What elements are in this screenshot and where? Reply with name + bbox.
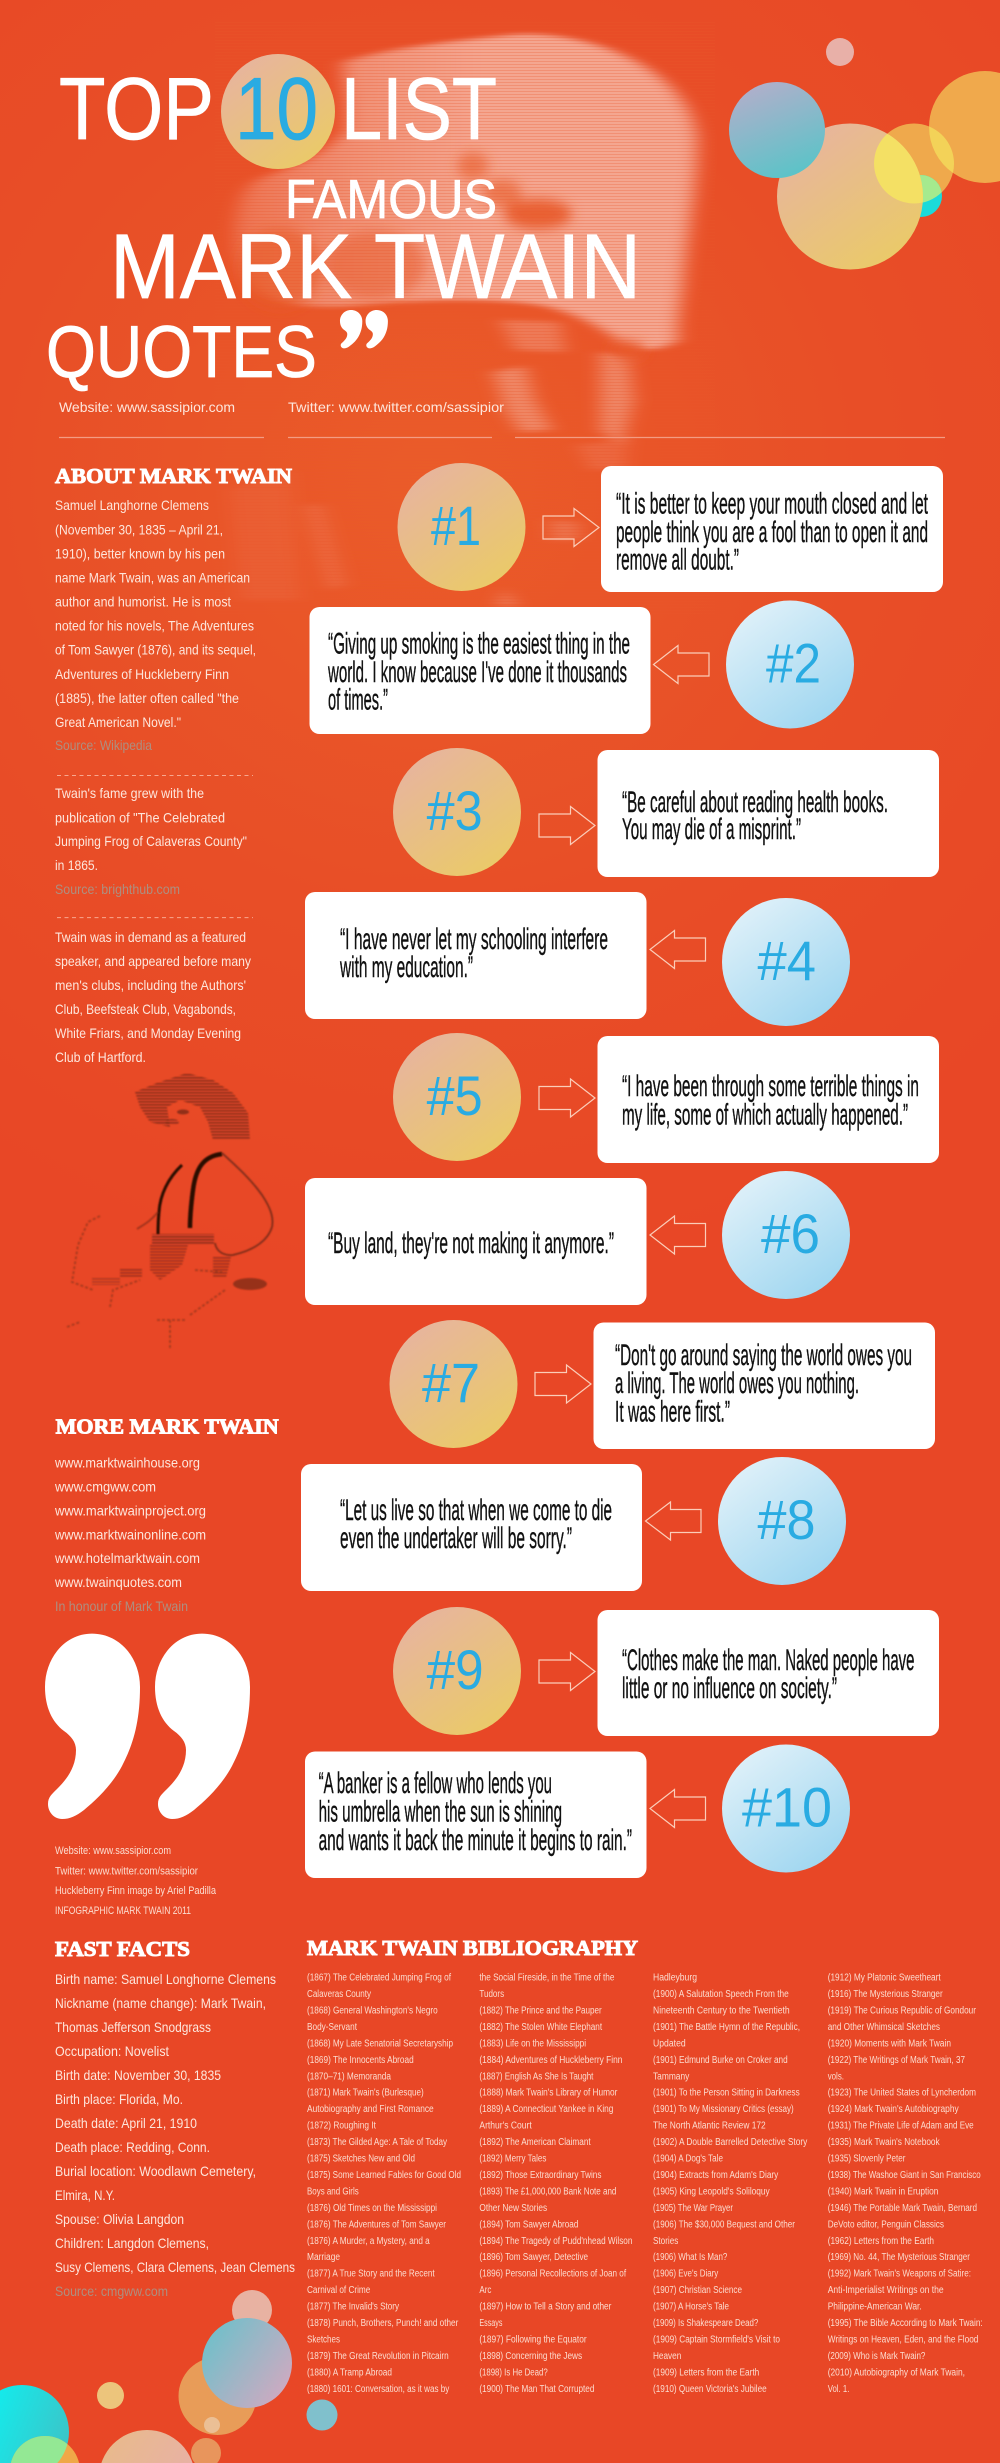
quote card 10: and wants it back the minute it begins to rain.” bbox=[319, 1824, 632, 1857]
bibliography column 2: (1892) Merry Tales bbox=[479, 2154, 546, 2164]
bibliography column 1: (1876) The Adventures of Tom Sawyer bbox=[307, 2219, 447, 2230]
number circle #1: #1 bbox=[431, 494, 481, 557]
bibliography column 1: Boys and Girls bbox=[307, 2186, 359, 2197]
number circle #2: #2 bbox=[766, 632, 821, 694]
bibliography column 2: (1898) Concerning the Jews bbox=[479, 2351, 582, 2362]
bibliography column 2: (1894) The Tragedy of Pudd'nhead Wilson bbox=[479, 2236, 632, 2247]
row: quote 6 bbox=[305, 1171, 850, 1305]
bibliography column 4: (1992) Mark Twain's Weapons of Satire: bbox=[828, 2269, 971, 2280]
number circle #1 bbox=[398, 463, 526, 591]
title number: 10: 10 bbox=[235, 59, 318, 158]
text block: jumping frog bbox=[55, 785, 247, 897]
bibliography column 4: (1912) My Platonic Sweetheart bbox=[828, 1973, 941, 1984]
bibliography column 2: (1898) Is He Dead? bbox=[479, 2367, 548, 2378]
bibliography column 4: (2009) Who is Mark Twain? bbox=[828, 2351, 926, 2362]
number circle #4: #4 bbox=[758, 929, 816, 992]
bibliography column 3: (1909) Captain Stormfield's Visit to bbox=[653, 2334, 780, 2346]
bibliography column 1: Body-Servant bbox=[307, 2022, 357, 2033]
number circle #7 bbox=[390, 1320, 518, 1448]
text block: speaker: Club, Beefsteak Club, Vagabonds, bbox=[55, 1001, 236, 1017]
bibliography column 3: Tammany bbox=[653, 2071, 689, 2082]
title: Top 10 List Famous Mark Twain Quotes bbox=[46, 54, 641, 393]
text block: speaker: Club of Hartford. bbox=[55, 1049, 146, 1065]
heading: about Mark Twain: ABOUT MARK TWAIN bbox=[55, 464, 292, 488]
panel: more Mark Twain bbox=[54, 1414, 279, 1614]
bibliography column 2: Other New Stories bbox=[479, 2203, 547, 2214]
bibliography column 2: (1897) How to Tell a Story and other bbox=[479, 2302, 612, 2313]
bibliography column 2: (1888) Mark Twain's Library of Humor bbox=[479, 2088, 618, 2099]
icon: small quotation mark bbox=[340, 310, 388, 348]
bibliography column 1: (1868) General Washington's Negro bbox=[307, 2006, 438, 2016]
bibliography column 1: (1872) Roughing It bbox=[307, 2121, 376, 2132]
list of facts: Children: Langdon Clemens, bbox=[55, 2235, 209, 2251]
bibliography column 1: Marriage bbox=[307, 2252, 340, 2263]
bibliography column 2: (1882) The Stolen White Elephant bbox=[479, 2022, 602, 2033]
number circle #5: #5 bbox=[427, 1064, 483, 1127]
bibliography column 2: (1900) The Man That Corrupted bbox=[479, 2384, 594, 2395]
list of facts: Birth name: Samuel Longhorne Clemens bbox=[55, 1971, 276, 1987]
heading: more Mark Twain: MORE MARK TWAIN bbox=[56, 1414, 279, 1438]
text block: speaker: speaker, and appeared before many bbox=[55, 953, 251, 969]
bibliography column 4: Philippine-American War. bbox=[828, 2302, 922, 2313]
number circle #10: #10 bbox=[742, 1776, 832, 1838]
bibliography column 1: (1878) Punch, Brothers, Punch! and other bbox=[307, 2318, 459, 2329]
arrow right bbox=[539, 1079, 595, 1117]
bibliography column 2: Arthur's Court bbox=[479, 2121, 532, 2132]
number circle #8 bbox=[718, 1457, 846, 1585]
list of facts: Spouse: Olivia Langdon bbox=[55, 2211, 184, 2227]
heading: bibliography: MARK TWAIN BIBLIOGRAPHY bbox=[307, 1936, 638, 1960]
bibliography column 2: Arc bbox=[479, 2285, 491, 2296]
text block: biography: name Mark Twain, was an American bbox=[55, 569, 250, 585]
list of links: In honour of Mark Twain bbox=[55, 1598, 188, 1614]
bibliography column 3: (1901) To My Missionary Critics (essay) bbox=[653, 2104, 794, 2115]
bibliography column 1: Sketches bbox=[307, 2334, 340, 2346]
quote card 1: remove all doubt.” bbox=[616, 544, 739, 576]
bibliography column 3: (1905) The War Prayer bbox=[653, 2203, 734, 2214]
bibliography column 1: (1879) The Great Revolution in Pitcairn bbox=[307, 2351, 449, 2362]
text block: biography bbox=[55, 497, 256, 753]
credits: INFOGRAPHIC MARK TWAIN 2011 bbox=[55, 1905, 191, 1917]
bibliography column 3: Nineteenth Century to the Twentieth bbox=[653, 2006, 790, 2016]
bibliography column 4: Vol. 1. bbox=[828, 2384, 849, 2395]
list of links: www.hotelmarktwain.com bbox=[54, 1550, 200, 1566]
arrow left bbox=[650, 1790, 706, 1828]
bibliography column 3: (1905) King Leopold's Soliloquy bbox=[653, 2186, 770, 2197]
number circle #6: #6 bbox=[761, 1202, 820, 1265]
quote card 6 bbox=[305, 1178, 646, 1305]
bibliography column 2: (1884) Adventures of Huckleberry Finn bbox=[479, 2055, 622, 2066]
row: quote 4 bbox=[305, 892, 850, 1026]
arrow right bbox=[543, 508, 599, 546]
bibliography column 1: (1876) Old Times on the Mississippi bbox=[307, 2203, 437, 2214]
arrow right bbox=[539, 1652, 595, 1690]
text block: biography: 1910), better known by his pen bbox=[55, 545, 225, 561]
quote card 6: “Buy land, they're not making it anymore.” bbox=[328, 1227, 614, 1260]
website and twitter links: Website: www.sassipior.com bbox=[59, 399, 235, 415]
list of facts: Death date: April 21, 1910 bbox=[55, 2115, 197, 2131]
row: quote 10 bbox=[305, 1744, 850, 1878]
credits: Website: www.sassipior.com bbox=[55, 1845, 171, 1857]
bibliography column 3: Heaven bbox=[653, 2351, 681, 2362]
row: quote 7 bbox=[390, 1320, 935, 1449]
arrow left bbox=[646, 1502, 701, 1540]
panel: fast facts bbox=[55, 1937, 295, 2299]
text block: biography: Adventures of Huckleberry Finn bbox=[55, 666, 229, 682]
list of facts: Elmira, N.Y. bbox=[55, 2187, 115, 2203]
number circle #5 bbox=[393, 1033, 521, 1161]
row: quote 9 bbox=[393, 1607, 939, 1736]
bibliography column 4: (1920) Moments with Mark Twain bbox=[828, 2038, 951, 2049]
panel: about Mark Twain bbox=[55, 464, 292, 1065]
text block: speaker: Twain was in demand as a featured bbox=[55, 929, 246, 945]
quote card 2 bbox=[310, 607, 650, 734]
bibliography column 1: (1877) A True Story and the Recent bbox=[307, 2269, 435, 2280]
quote card 3: You may die of a misprint.” bbox=[622, 813, 801, 846]
bibliography column 3: (1901) The Battle Hymn of the Republic, bbox=[653, 2022, 800, 2033]
arrow right bbox=[539, 806, 595, 844]
list of facts: Birth place: Florida, Mo. bbox=[55, 2091, 183, 2107]
quote card 8: “Let us live so that when we come to die bbox=[340, 1494, 612, 1527]
bibliography column 1: (1876) A Murder, a Mystery, and a bbox=[307, 2236, 430, 2247]
list of links: www.twainquotes.com bbox=[54, 1574, 182, 1590]
number circle #10 bbox=[722, 1744, 850, 1872]
bibliography column 1: (1868) My Late Senatorial Secretaryship bbox=[307, 2038, 453, 2049]
heading: fast facts: FAST FACTS bbox=[55, 1937, 190, 1961]
title words: MARK TWAIN: MARK TWAIN bbox=[110, 216, 641, 318]
text block: jumping frog: publication of "The Celebrated bbox=[55, 809, 225, 825]
sketch: Huckleberry Finn bbox=[67, 1073, 273, 1350]
bibliography column 2: (1893) The £1,000,000 Bank Note and bbox=[479, 2186, 616, 2197]
bibliography column 1: (1875) Some Learned Fables for Good Old bbox=[307, 2170, 461, 2181]
list of facts: Thomas Jefferson Snodgrass bbox=[55, 2019, 211, 2035]
bibliography column 2: (1897) Following the Equator bbox=[479, 2334, 587, 2346]
quote card 2: world. I know because I've done it thousands bbox=[327, 656, 627, 689]
list of facts: Burial location: Woodlawn Cemetery, bbox=[55, 2163, 256, 2179]
bibliography column 3: (1902) A Double Barrelled Detective Story bbox=[653, 2137, 807, 2148]
bibliography column 3: (1904) Extracts from Adam's Diary bbox=[653, 2170, 778, 2181]
circle behind 10 bbox=[221, 54, 335, 169]
quote card 2: “Giving up smoking is the easiest thing in the bbox=[328, 628, 630, 660]
list of facts: Death place: Redding, Conn. bbox=[55, 2139, 210, 2155]
title word: FAMOUS: FAMOUS bbox=[285, 168, 497, 230]
bibliography column 1: (1880) A Tramp Abroad bbox=[307, 2367, 392, 2378]
bibliography column 2: (1882) The Prince and the Pauper bbox=[479, 2006, 602, 2016]
bibliography column 3: (1907) A Horse's Tale bbox=[653, 2302, 729, 2313]
bibliography column 3: (1906) The $30,000 Bequest and Other bbox=[653, 2219, 796, 2230]
quote card 3 bbox=[598, 750, 939, 877]
bibliography column 4: DeVoto editor, Penguin Classics bbox=[828, 2219, 944, 2230]
text block: biography: Great American Novel." bbox=[55, 714, 181, 730]
bibliography column 1: (1870–71) Memoranda bbox=[307, 2071, 391, 2082]
row: quote 2 bbox=[310, 600, 854, 734]
bibliography column 4: (1935) Mark Twain's Notebook bbox=[828, 2137, 941, 2148]
bibliography column 3: (1906) Eve's Diary bbox=[653, 2269, 718, 2280]
list of facts: Nickname (name change): Mark Twain, bbox=[55, 1995, 266, 2011]
icon: large quotation mark bbox=[45, 1634, 250, 1819]
quote card 2: of times.” bbox=[328, 684, 388, 716]
quote card 7 bbox=[594, 1322, 935, 1449]
title word: TOP: TOP bbox=[59, 59, 214, 158]
text block: biography: Samuel Langhorne Clemens bbox=[55, 497, 209, 513]
decorative circles top right bbox=[729, 38, 1000, 270]
bibliography column 1: (1877) The Invalid's Story bbox=[307, 2302, 399, 2313]
decorative circles bottom left bbox=[0, 2290, 338, 2463]
quote card 10 bbox=[305, 1752, 646, 1878]
bibliography column 4: Anti-Imperialist Writings on the bbox=[828, 2285, 944, 2296]
bibliography column 3: (1910) Queen Victoria's Jubilee bbox=[653, 2384, 767, 2395]
number circle #9: #9 bbox=[427, 1638, 484, 1701]
bibliography column 3: (1909) Letters from the Earth bbox=[653, 2367, 759, 2378]
arrow right bbox=[535, 1365, 591, 1403]
number circle #3: #3 bbox=[427, 779, 483, 842]
bibliography column 2: Tudors bbox=[479, 1989, 504, 2000]
quote card 5 bbox=[598, 1036, 939, 1163]
text block: biography: (1885), the latter often called "the bbox=[55, 690, 239, 706]
list of facts bbox=[55, 1971, 295, 2299]
row: quote 1 bbox=[398, 463, 943, 592]
list of links: www.marktwainhouse.org bbox=[54, 1454, 200, 1470]
list of links: www.cmgww.com bbox=[54, 1478, 156, 1494]
bibliography column 1: Calaveras County bbox=[307, 1989, 371, 2000]
bibliography column 4: (1924) Mark Twain's Autobiography bbox=[828, 2104, 959, 2115]
bibliography column 2: (1883) Life on the Mississippi bbox=[479, 2038, 586, 2049]
bibliography column 3: Updated bbox=[653, 2038, 686, 2049]
bibliography column 2: (1896) Tom Sawyer, Detective bbox=[479, 2252, 588, 2263]
bibliography column 2: (1894) Tom Sawyer Abroad bbox=[479, 2219, 578, 2230]
credits: Twitter: www.twitter.com/sassipior bbox=[55, 1866, 198, 1878]
text block: biography: Source: Wikipedia bbox=[55, 737, 152, 753]
text block: jumping frog: Twain's fame grew with the bbox=[55, 785, 204, 801]
arrow left bbox=[650, 1216, 706, 1254]
bibliography column 1: (1869) The Innocents Abroad bbox=[307, 2055, 414, 2066]
bibliography column 1: (1871) Mark Twain's (Burlesque) bbox=[307, 2088, 424, 2099]
number circle #3 bbox=[393, 748, 521, 876]
bibliography column 2: (1892) Those Extraordinary Twins bbox=[479, 2170, 601, 2181]
bibliography column 3: The North Atlantic Review 172 bbox=[653, 2121, 766, 2132]
text block: speaker: White Friars, and Monday Evening bbox=[55, 1025, 241, 1041]
bibliography column 2: (1896) Personal Recollections of Joan of bbox=[479, 2269, 626, 2280]
bibliography column 2: (1887) English As She Is Taught bbox=[479, 2071, 594, 2082]
quote card 4 bbox=[305, 892, 646, 1019]
bibliography column 4: (1922) The Writings of Mark Twain, 37 bbox=[828, 2055, 965, 2066]
bibliography column 4: (1935) Slovenly Peter bbox=[828, 2154, 906, 2164]
arrow left bbox=[650, 930, 706, 968]
bibliography column 4: (2010) Autobiography of Mark Twain, bbox=[828, 2367, 965, 2378]
bibliography column 3: (1904) A Dog's Tale bbox=[653, 2154, 723, 2164]
bibliography column 3: (1901) To the Person Sitting in Darkness bbox=[653, 2088, 800, 2099]
bibliography column 1: Autobiography and First Romance bbox=[307, 2104, 434, 2115]
bibliography column 1: Carnival of Crime bbox=[307, 2285, 371, 2296]
bibliography column 4 bbox=[828, 1973, 983, 2395]
website and twitter links bbox=[59, 399, 504, 415]
credits: Huckleberry Finn image by Ariel Padilla bbox=[55, 1885, 217, 1897]
bibliography column 1 bbox=[307, 1973, 461, 2395]
bibliography column 3: Hadleyburg bbox=[653, 1973, 697, 1984]
bibliography column 3: (1909) Is Shakespeare Dead? bbox=[653, 2318, 759, 2329]
quote card 8: even the undertaker will be sorry.” bbox=[340, 1522, 572, 1555]
quote card 10: “A banker is a fellow who lends you bbox=[319, 1767, 552, 1800]
list of facts: Occupation: Novelist bbox=[55, 2043, 169, 2059]
bibliography column 2: the Social Fireside, in the Time of the bbox=[479, 1973, 615, 1984]
bibliography column 2: Essays bbox=[479, 2318, 502, 2329]
quote card 10: his umbrella when the sun is shining bbox=[319, 1796, 562, 1828]
text block: speaker bbox=[55, 929, 251, 1065]
number circle #9 bbox=[393, 1607, 521, 1735]
text block: jumping frog: in 1865. bbox=[55, 857, 98, 873]
title word: QUOTES: QUOTES bbox=[46, 312, 317, 393]
number circle #6 bbox=[722, 1171, 850, 1299]
quote card 7: It was here first.” bbox=[615, 1396, 730, 1428]
number circle #8: #8 bbox=[758, 1488, 816, 1551]
list of links: www.marktwainonline.com bbox=[54, 1526, 206, 1542]
bibliography column 3: (1906) What Is Man? bbox=[653, 2252, 728, 2263]
quote card 1 bbox=[601, 466, 943, 592]
bibliography column 2: (1892) The American Claimant bbox=[479, 2137, 591, 2148]
text block: biography: author and humorist. He is most bbox=[55, 594, 231, 610]
bibliography column 4: and Other Whimsical Sketches bbox=[828, 2022, 940, 2033]
text block: biography: (November 30, 1835 – April 21, bbox=[55, 521, 223, 537]
text block: biography: of Tom Sawyer (1876), and its sequel, bbox=[55, 642, 256, 658]
list of links bbox=[54, 1454, 206, 1614]
bibliography column 1: (1873) The Gilded Age: A Tale of Today bbox=[307, 2137, 447, 2148]
bibliography column 3 bbox=[653, 1973, 807, 2395]
bibliography column 3: Stories bbox=[653, 2236, 678, 2247]
title word: LIST: LIST bbox=[341, 59, 497, 158]
bibliography column 4: vols. bbox=[828, 2071, 844, 2082]
number circle #7: #7 bbox=[422, 1351, 480, 1414]
list of links: www.marktwainproject.org bbox=[54, 1502, 206, 1518]
bibliography column 3: (1907) Christian Science bbox=[653, 2285, 742, 2296]
bibliography column 4: (1969) No. 44, The Mysterious Stranger bbox=[828, 2252, 971, 2263]
quote card 9 bbox=[598, 1610, 939, 1736]
bibliography column 4: (1916) The Mysterious Stranger bbox=[828, 1989, 943, 2000]
list of facts: Birth date: November 30, 1835 bbox=[55, 2067, 221, 2083]
bibliography column 3: (1900) A Salutation Speech From the bbox=[653, 1989, 789, 2000]
list of facts: Source: cmgww.com bbox=[55, 2283, 168, 2299]
text block: jumping frog: Source: brighthub.com bbox=[55, 881, 180, 897]
quote card 4: “I have never let my schooling interfere bbox=[340, 923, 608, 956]
bibliography column 4: (1940) Mark Twain in Eruption bbox=[828, 2186, 938, 2197]
credits bbox=[55, 1845, 217, 1917]
row: quote 8 bbox=[301, 1457, 846, 1591]
bibliography column 1: (1880) 1601: Conversation, as it was by bbox=[307, 2384, 449, 2395]
row: quote 3 bbox=[393, 748, 939, 877]
arrow left bbox=[654, 646, 709, 684]
bibliography column 4: (1962) Letters from the Earth bbox=[828, 2236, 934, 2247]
quote card 4: with my education.” bbox=[339, 951, 473, 984]
bibliography column 2 bbox=[479, 1973, 632, 2395]
portrait of Mark Twain bbox=[215, 20, 715, 615]
bibliography column 1: (1875) Sketches New and Old bbox=[307, 2154, 415, 2164]
panel: bibliography bbox=[307, 1936, 983, 2395]
bibliography column 3: (1901) Edmund Burke on Croker and bbox=[653, 2055, 788, 2066]
text block: speaker: men's clubs, including the Authors' bbox=[55, 977, 246, 993]
bibliography column 1: (1867) The Celebrated Jumping Frog of bbox=[307, 1973, 451, 1984]
quote card 8 bbox=[301, 1464, 642, 1591]
row: quote 5 bbox=[393, 1033, 939, 1163]
text block: jumping frog: Jumping Frog of Calaveras County" bbox=[55, 833, 247, 849]
number circle #4 bbox=[722, 898, 850, 1026]
number circle #2 bbox=[726, 600, 854, 728]
website and twitter links: Twitter: www.twitter.com/sassipior bbox=[288, 399, 504, 415]
list of facts: Susy Clemens, Clara Clemens, Jean Clemens bbox=[55, 2259, 295, 2275]
bibliography column 2: (1889) A Connecticut Yankee in King bbox=[479, 2104, 613, 2115]
text block: biography: noted for his novels, The Adventures bbox=[55, 618, 254, 634]
